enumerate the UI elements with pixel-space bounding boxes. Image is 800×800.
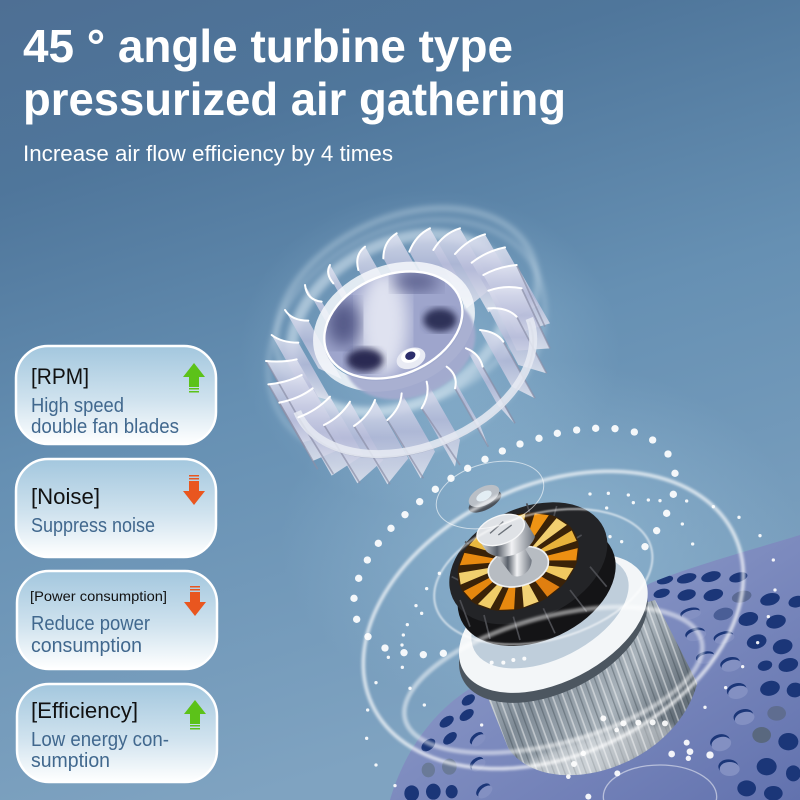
motor assembly <box>350 424 777 800</box>
card: RPM: High speed <box>31 395 124 417</box>
fan eye opening <box>323 270 464 380</box>
icon: orange down arrow <box>184 586 206 616</box>
fan lower ring <box>297 318 533 457</box>
fan blade bodies <box>266 228 550 484</box>
motor copper coils <box>442 494 595 630</box>
airflow rings around motor <box>315 413 792 800</box>
card: Power consumption: [Power consumption] <box>30 588 167 604</box>
card: Efficiency: sumption <box>31 750 110 772</box>
airflow swirls around fan <box>225 169 589 509</box>
card: Efficiency: [Efficiency] <box>31 698 138 723</box>
motor small bearing <box>465 480 505 517</box>
fan blade edges <box>266 228 522 426</box>
perforated blue dome <box>390 535 800 800</box>
subtitle: Increase air flow efficiency by 4 times <box>23 141 393 166</box>
card: Efficiency: Low energy con- <box>31 729 169 751</box>
card: Power consumption: consumption <box>31 635 142 657</box>
fan top disc <box>300 245 488 408</box>
card: Power consumption: Reduce power <box>31 613 150 635</box>
airflow particle dots <box>350 425 777 800</box>
icon: orange down arrow <box>183 475 205 505</box>
card: Noise: Suppress noise <box>31 515 155 537</box>
lit lower edges of crescent holes <box>470 608 756 800</box>
motor black stator <box>430 478 635 670</box>
motor barrel with fins <box>488 600 698 776</box>
fan cone body <box>327 275 491 419</box>
card: RPM <box>16 346 216 444</box>
card: Noise: [Noise] <box>31 484 100 509</box>
card: Power consumption <box>17 571 217 669</box>
fan hub <box>393 343 429 373</box>
turbine fan wheel <box>264 203 550 484</box>
fan blade side edges <box>266 265 550 484</box>
glow behind fan and motor <box>240 190 800 720</box>
title <box>23 20 566 125</box>
card: Efficiency <box>17 684 217 782</box>
title: 45 ° angle turbine type <box>23 20 513 72</box>
icon: green up arrow <box>183 363 205 392</box>
card: RPM: double fan blades <box>31 416 179 438</box>
icon: green up arrow <box>184 700 206 730</box>
title: pressurized air gathering <box>23 73 566 125</box>
motor shaft and cap <box>473 508 553 593</box>
motor white collar ring <box>436 525 670 731</box>
card: Noise <box>16 459 216 557</box>
card: RPM: [RPM] <box>31 364 89 389</box>
